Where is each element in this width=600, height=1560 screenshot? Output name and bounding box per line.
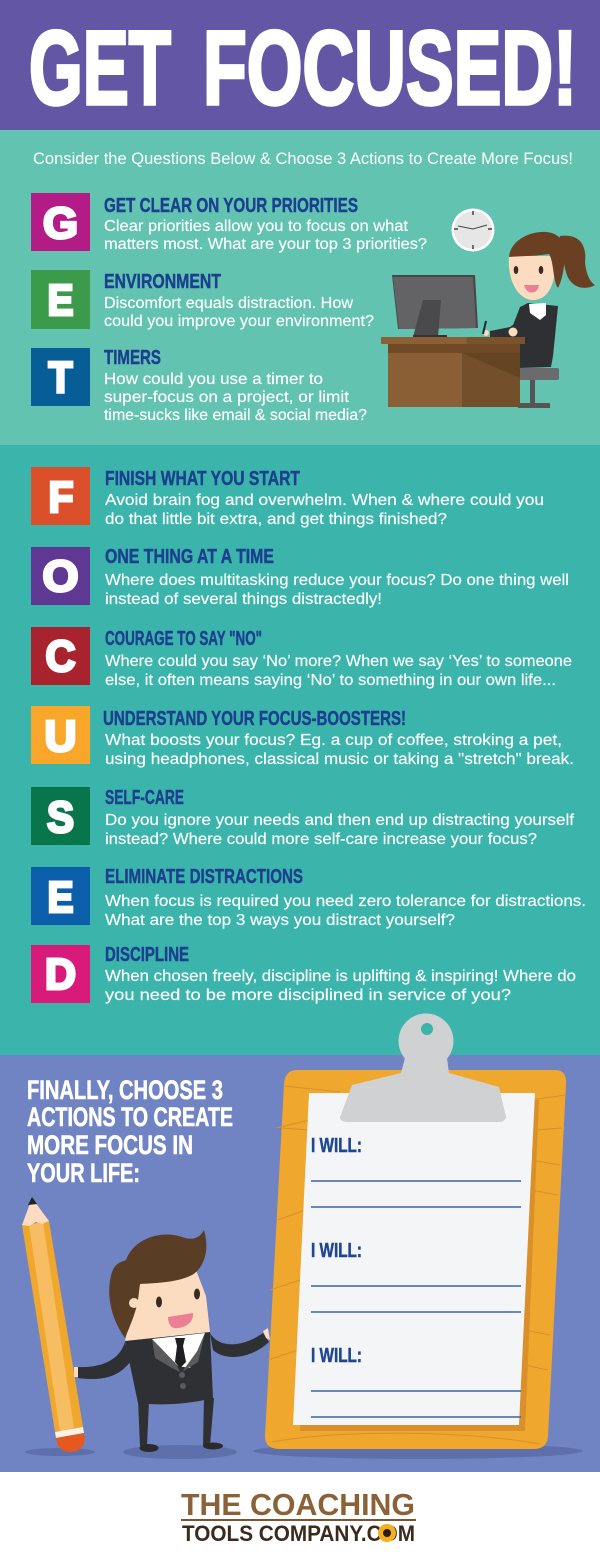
writing block 2	[311, 1240, 521, 1312]
icon: sunflower	[378, 1524, 396, 1542]
item: S: instead? Where could more self-care increase your focus?	[105, 831, 537, 848]
item: C: else, it often means saying ‘No’ to something in our own life...	[105, 672, 556, 689]
jacket	[125, 1332, 213, 1404]
title	[29, 10, 577, 127]
item: O: O	[42, 552, 78, 601]
torso	[510, 303, 558, 368]
shirt	[152, 1333, 205, 1368]
heading: finally	[27, 1075, 233, 1188]
panel: footer logo: THE COACHING	[181, 1487, 415, 1522]
item: F: do that little bit extra, and get things finished?	[105, 511, 447, 528]
item: O: Where does multitasking reduce your focus? Do one thing well	[105, 572, 569, 589]
item: U: U	[44, 712, 76, 761]
item: F	[31, 467, 544, 528]
item: G: G	[43, 199, 78, 248]
writing block 3: I WILL:	[311, 1345, 362, 1367]
panel: footer logo: TOOLS COMPANY.COM	[182, 1521, 415, 1546]
item: T: super-focus on a project, or limit	[104, 389, 350, 406]
ground shadows	[25, 1443, 583, 1459]
item: T: T	[48, 353, 73, 402]
collar	[529, 303, 546, 320]
writing block 1: I WILL:	[311, 1135, 362, 1157]
item: E: could you improve your environment?	[104, 313, 374, 330]
item: F: Avoid brain fog and overwhelm. When & where could you	[105, 492, 544, 509]
intro text: Consider the Questions Below & Choose 3 Actions to Create More Focus!	[33, 149, 573, 168]
ponytail	[558, 236, 595, 288]
heading: finally: ACTIONS TO CREATE	[27, 1102, 233, 1132]
item: D: D	[45, 950, 76, 999]
item: D: DISCIPLINE	[105, 943, 189, 966]
item: F: FINISH WHAT YOU START	[105, 467, 300, 490]
panel: title banner	[0, 0, 600, 130]
item: O: instead of several things distractedly!	[105, 591, 382, 608]
item: T: How could you use a timer to	[104, 371, 323, 388]
item: T: time-sucks like email & social media?	[104, 407, 367, 424]
panel: FOCUSED section	[0, 445, 600, 1055]
item: U: What boosts your focus? Eg. a cup of coffee, stroking a pet,	[105, 732, 562, 749]
clip	[340, 1014, 506, 1122]
item: O: ONE THING AT A TIME	[105, 545, 274, 568]
hair	[109, 1230, 206, 1338]
item: E: E	[48, 276, 74, 325]
item: F: F	[48, 473, 74, 522]
item: E: Discomfort equals distraction. How	[104, 295, 353, 312]
illustration: clipboard	[265, 1014, 566, 1449]
panel: action section	[0, 1014, 600, 1472]
item: U	[31, 706, 574, 768]
board	[265, 1070, 566, 1449]
item: G	[31, 193, 427, 253]
title: GET	[29, 10, 171, 127]
item: C: COURAGE TO SAY "NO"	[105, 627, 262, 650]
desk	[381, 337, 525, 407]
monitor	[392, 275, 478, 338]
illustration: pencil	[22, 1197, 85, 1452]
icon: wall clock	[452, 208, 494, 252]
item: E: When focus is required you need zero tolerance for distractions.	[105, 893, 586, 910]
item: U: UNDERSTAND YOUR FOCUS-BOOSTERS!	[103, 707, 406, 730]
panel: GET section	[0, 130, 600, 445]
illustration: woman at desk	[381, 232, 595, 408]
writing block 3	[311, 1345, 521, 1417]
item: D: you need to be more disciplined in service of you?	[105, 987, 511, 1004]
item: E	[31, 865, 586, 929]
item: E: ENVIRONMENT	[104, 270, 221, 293]
item: S	[31, 786, 575, 848]
paper	[293, 1093, 535, 1425]
pen	[483, 321, 486, 334]
item: G: GET CLEAR ON YOUR PRIORITIES	[104, 194, 358, 217]
item: G: Clear priorities allow you to focus on what	[104, 218, 409, 235]
tie	[175, 1338, 186, 1368]
panel: footer logo	[0, 1472, 600, 1560]
heading: finally: YOUR LIFE:	[27, 1158, 140, 1188]
item: C: C	[46, 632, 76, 681]
illustration: businessman	[74, 1230, 270, 1452]
item: C	[31, 627, 572, 689]
item: S: SELF-CARE	[105, 786, 184, 809]
face	[509, 256, 556, 300]
arms	[78, 1342, 130, 1379]
item: C: Where could you say ‘No’ more? When we say ‘Yes’ to someone	[105, 653, 572, 670]
item: O	[31, 545, 569, 608]
arm	[490, 318, 532, 342]
chair	[515, 368, 559, 408]
hair	[509, 232, 565, 288]
item: E	[31, 270, 374, 330]
item: S: S	[47, 793, 74, 842]
item: G: matters most. What are your top 3 priorities?	[104, 236, 427, 253]
item: S: Do you ignore your needs and then end up distracting yourself	[105, 812, 575, 829]
item: E: ELIMINATE DISTRACTIONS	[105, 865, 303, 888]
item: E: E	[48, 873, 74, 922]
head	[125, 1270, 210, 1341]
writing block 2: I WILL:	[311, 1240, 362, 1262]
heading: finally: FINALLY, CHOOSE 3	[27, 1075, 223, 1105]
item: D	[31, 943, 576, 1004]
item: U: using headphones, classical music or taking a "stretch" break.	[105, 751, 574, 768]
writing block 1	[311, 1135, 521, 1207]
item: E: What are the top 3 ways you distract yourself?	[105, 912, 455, 929]
heading: finally: MORE FOCUS IN	[27, 1130, 193, 1160]
legs	[138, 1400, 149, 1446]
item: T: TIMERS	[104, 346, 161, 369]
item: D: When chosen freely, discipline is uplifting & inspiring! Where do	[105, 968, 576, 985]
item: T	[31, 346, 367, 424]
